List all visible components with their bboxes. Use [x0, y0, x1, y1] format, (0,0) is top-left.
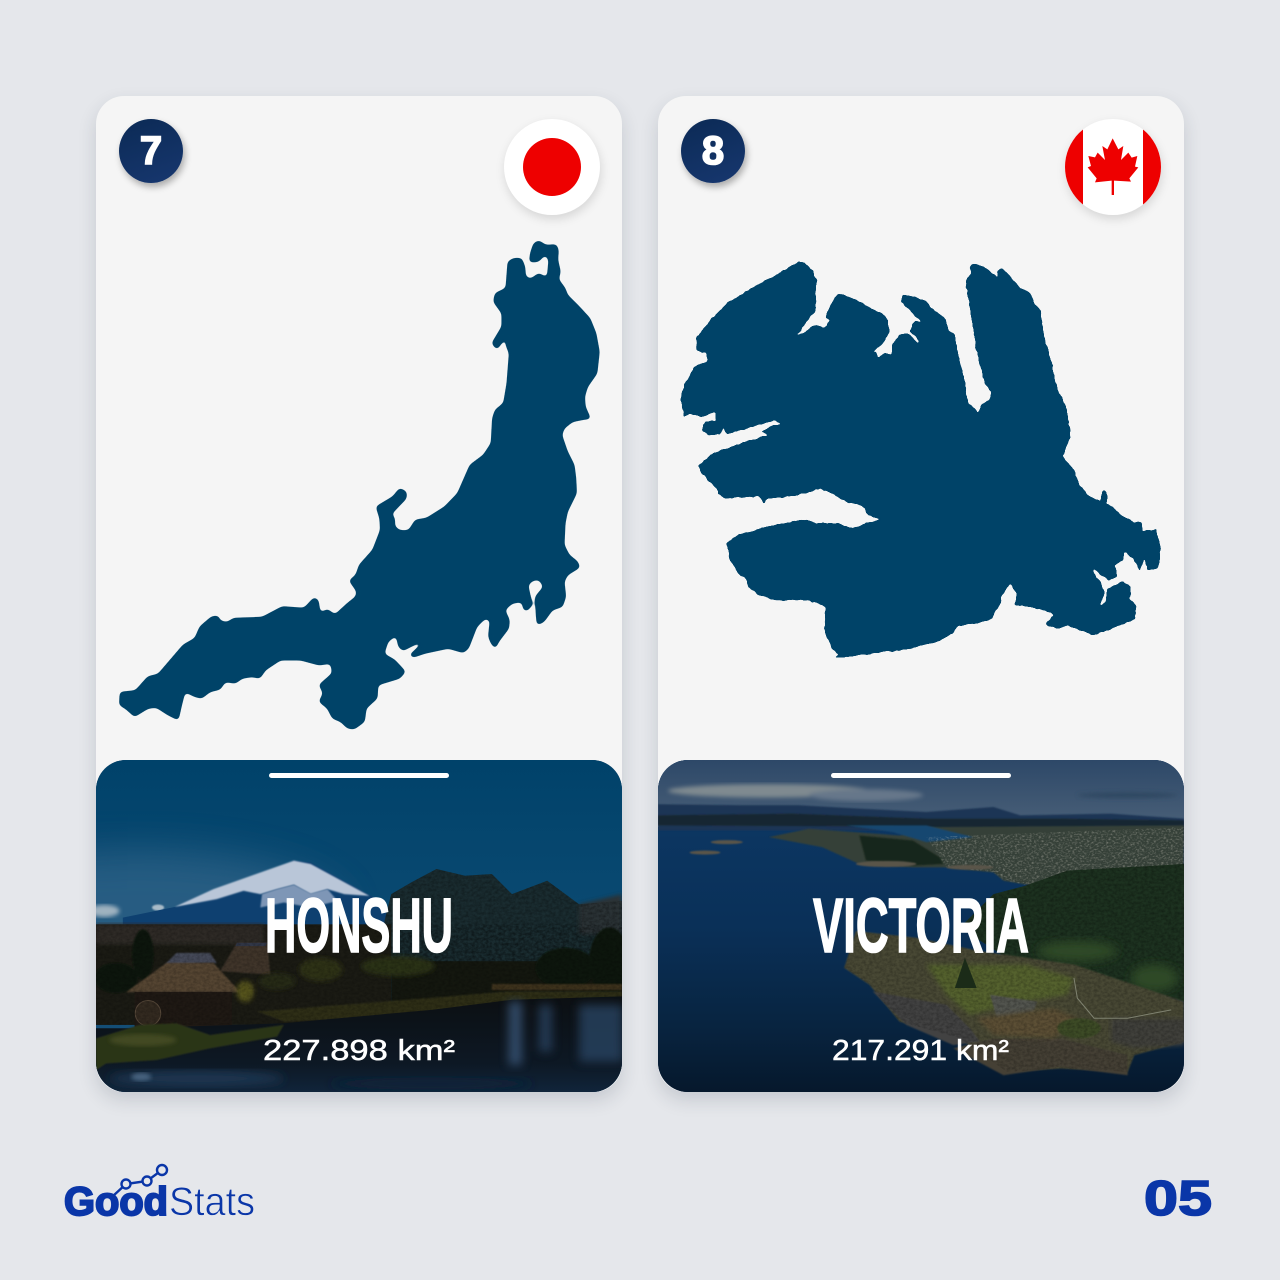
area value: 217.291 km²	[832, 1035, 1009, 1067]
rank badge 8	[681, 119, 745, 183]
icon: trend line above logo	[113, 1165, 167, 1196]
photo: aerial view of Victoria coast	[658, 760, 1184, 1092]
panel: Victoria card	[658, 96, 1184, 1092]
map: Victoria island silhouette	[680, 262, 1161, 658]
panel: Honshu card	[96, 96, 622, 1092]
divider bar	[831, 773, 1011, 778]
icon: Canada flag	[1065, 119, 1161, 215]
rank badge 7: 7	[140, 129, 162, 173]
icon: Japan flag	[504, 119, 600, 215]
panel: Honshu photo with name and area	[96, 760, 622, 1092]
divider bar	[269, 773, 449, 778]
heading: HONSHU: HONSHU	[265, 883, 453, 969]
rank badge 7	[119, 119, 183, 183]
page number: 05	[1144, 1172, 1212, 1225]
heading: VICTORIA: VICTORIA	[813, 883, 1029, 969]
area value: 227.898 km²	[263, 1035, 455, 1067]
logo: GoodStats	[64, 1164, 255, 1222]
map: Honshu island silhouette	[119, 241, 600, 730]
photo: Mount Fuji and lake village	[96, 760, 622, 1092]
panel: Victoria photo with name and area	[658, 760, 1184, 1092]
rank badge 8: 8	[702, 129, 724, 173]
